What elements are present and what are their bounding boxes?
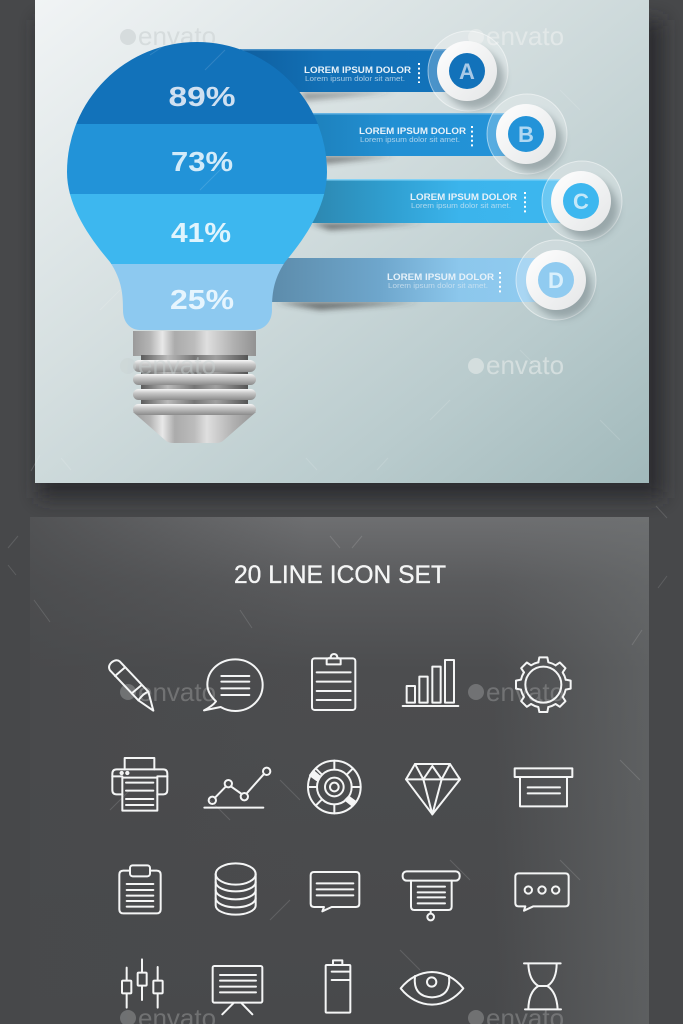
icon: archive box [515, 768, 572, 806]
badge C: C [573, 189, 589, 214]
light bulb metal screw base [133, 331, 256, 443]
panel: light bulb infographic [35, 0, 649, 483]
icon: eye [401, 972, 463, 1005]
icon: presentation board [403, 871, 460, 920]
icon: diamond [406, 764, 460, 814]
band 73% [60, 124, 335, 194]
icon: sliders [122, 959, 163, 1008]
icon: bar chart [403, 660, 458, 706]
icon: clipboard list [119, 865, 161, 913]
ribbon shadows [275, 92, 425, 310]
icon: dots message [515, 873, 569, 911]
ribbon A subtext: Lorem ipsum dolor sit amet. [305, 74, 405, 83]
watermarks on icon panel [120, 677, 564, 1024]
ribbon B [300, 113, 510, 156]
label 25%: 25% [170, 284, 234, 315]
watermarks on top panel: envato [486, 350, 564, 380]
icon: chat box [311, 872, 359, 911]
band 25% [111, 264, 284, 330]
ribbon A heading: LOREM IPSUM DOLOR [304, 65, 412, 75]
watermarks on icon panel: envato [486, 677, 564, 707]
icon: database [216, 863, 256, 915]
icon grid rows 3 and 4 [119, 863, 569, 1014]
ribbon C dots [524, 192, 526, 213]
icon: printer [112, 758, 167, 811]
ribbon D dots [499, 272, 501, 293]
band 41% [60, 194, 335, 264]
panel: icon set background [30, 517, 649, 1024]
drop shadow around top panel [38, 20, 663, 498]
icon: pencil [109, 660, 153, 711]
ribbon A [240, 49, 452, 92]
icon: chip [308, 761, 361, 813]
title: 20 LINE ICON SET [234, 561, 446, 589]
ribbon B dots [471, 126, 473, 147]
badge B [487, 94, 567, 174]
watermark on bulb base: envato [138, 350, 216, 380]
label 89%: 89% [168, 81, 236, 112]
icon: screen on stand [213, 966, 262, 1014]
label 73%: 73% [171, 146, 233, 177]
ribbon B subtext: Lorem ipsum dolor sit amet. [360, 135, 460, 144]
icon: line chart [204, 768, 270, 808]
badge D: D [548, 268, 564, 293]
watermarks on top panel: envato [138, 21, 216, 51]
badge C [542, 161, 622, 241]
ribbon A dots [418, 63, 420, 83]
icon: hourglass [524, 963, 561, 1009]
ribbon B heading: LOREM IPSUM DOLOR [359, 126, 467, 136]
ribbon C subtext: Lorem ipsum dolor sit amet. [411, 201, 511, 210]
badge B: B [518, 122, 534, 147]
icon: clipboard [312, 654, 355, 710]
icon: speech bubble [204, 659, 263, 711]
ribbon D heading: LOREM IPSUM DOLOR [387, 272, 495, 282]
watermarks on top panel: envato [486, 21, 564, 51]
watermarks on icon panel: envato [138, 677, 216, 707]
badge A [428, 31, 508, 111]
icon grid rows 1 and 2 [109, 654, 572, 814]
ribbon C [300, 179, 566, 223]
icon: battery [326, 960, 350, 1013]
badge D [516, 240, 596, 320]
watermarks on top panel [120, 21, 564, 380]
band 89% [76, 42, 318, 124]
ribbon D [272, 258, 540, 302]
badge A: A [459, 59, 475, 84]
icon: gear [515, 657, 571, 713]
ribbon C heading: LOREM IPSUM DOLOR [410, 192, 518, 202]
light bulb glass [60, 40, 335, 332]
label 41%: 41% [171, 217, 231, 248]
ribbon D subtext: Lorem ipsum dolor sit amet. [388, 281, 488, 290]
